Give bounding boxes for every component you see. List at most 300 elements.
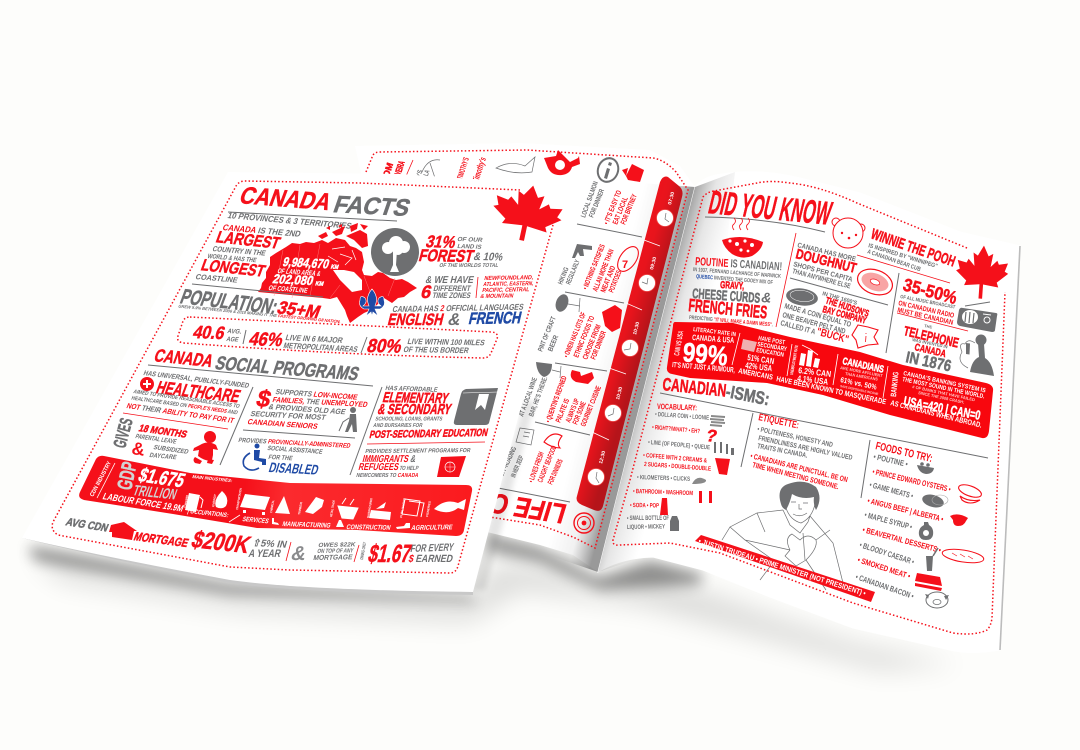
languages <box>386 302 525 329</box>
time zones: NEWFOUNDLAND, <box>484 275 534 282</box>
time zones: TIME ZONES <box>432 291 472 300</box>
row: salmon: FOR BRITNEY <box>619 193 639 226</box>
row: craft beer: PINT OF CRAFT <box>537 315 558 353</box>
affluent: SAVE DISPOSABLE INCOME <box>840 384 879 396</box>
row: craft beer: CHOOSE FROM <box>581 323 603 361</box>
affluent <box>840 356 885 396</box>
row: hiking: ALLAN MORE THAN <box>591 248 616 293</box>
mortgage row: & <box>289 543 309 565</box>
mortgage row: OWES $22K <box>318 541 357 549</box>
heading: canadian-isms: CANADIAN <box>662 374 727 401</box>
immigrants block <box>356 448 472 479</box>
poutine text: CHEESE CURDS <box>692 285 761 306</box>
icon: telephone <box>960 334 994 376</box>
icon: fleur de lis <box>360 289 384 316</box>
healthcare block: HAS UNIVERSAL, PUBLICLY-FUNDED <box>142 369 250 390</box>
time zones: 6 <box>419 281 434 302</box>
affluent: THAN AMERICANS <box>845 371 878 382</box>
unemployment: UNEMPLOYMENT RATE <box>789 345 799 375</box>
education block: AND BURSARIES FOR <box>373 423 423 429</box>
languages: FRENCH <box>467 308 523 328</box>
post secondary: HAVE POST <box>758 335 786 347</box>
masquerade line: AS CANADIANS WHEN ABROAD. <box>890 398 983 430</box>
healthcare block: NOT THEIR ABILITY TO PAY FOR IT <box>125 401 236 425</box>
drop shadows <box>28 533 960 670</box>
map stats: OF COASTLINE <box>267 284 309 295</box>
immigrants block: PROVIDES SETTLEMENT PROGRAMS FOR <box>365 448 472 455</box>
vocabulary list: • KILOMETERS • CLICKS <box>637 474 690 483</box>
winnie the pooh text: A CANADIAN BEAR CUB <box>866 249 922 273</box>
stats box: LIVE IN 6 MAJOR <box>284 333 344 345</box>
gdp: TRILLION <box>131 483 179 503</box>
row: hiking: REGULARLY <box>565 259 582 286</box>
dotted frame <box>52 181 553 573</box>
row: jeep: FOR DINNERS <box>546 457 565 486</box>
masquerade line: HAVE BEEN KNOWN TO MASQUERADE <box>776 374 887 406</box>
banner: justin trudeau: • JUSTIN TRUDEAU • PRIME MINISTER (NOT PRESIDENT) • <box>697 536 867 598</box>
dotted frame <box>366 150 688 548</box>
magazine: back left page <box>355 143 695 572</box>
affluent: 61% vs. 50% <box>840 375 878 392</box>
occupations: CONSTRUCTION <box>345 524 391 532</box>
low income block: FAMILIES, THE UNEMPLOYED <box>271 395 369 409</box>
title: DID YOU KNOW <box>705 185 836 233</box>
banking: SINCE THE 2008 CRASH: <box>918 390 965 405</box>
heading: social programs <box>152 345 362 385</box>
low income block: SUPPORTS LOW-INCOME <box>274 387 359 402</box>
unemployment: 6.2% CAN <box>798 365 832 379</box>
vocabulary list: • BATHROOM • WASHROOM <box>633 488 693 497</box>
population: GREW 5.9% BETWEEN 2006 & 2010 MAKING IT THE FASTEST GROWING G8 NATION. <box>178 304 342 324</box>
icon: radio <box>957 302 997 332</box>
magazine: right page <box>598 172 1020 652</box>
vocabulary list: LIQUOR • MICKEY <box>627 523 666 531</box>
foods to try list: • POUTINE • <box>873 452 909 469</box>
foods to try list: • SMOKED MEAT • <box>856 555 912 581</box>
row: hiking: • NOTHING SATISFIES <box>581 243 607 291</box>
doughnut text <box>791 242 859 291</box>
disability block: SOCIAL ASSISTANCE <box>266 445 324 456</box>
clock 2 <box>638 274 656 292</box>
banking: THE MOST SOUND IN THE WORLD. <box>902 376 985 400</box>
disability block <box>237 437 352 478</box>
industry icons: ENERGY <box>211 494 217 507</box>
row: craft beer: ETHNIC FOODS TO <box>572 314 596 359</box>
row: salmon: EAT LOCAL <box>611 195 630 226</box>
post secondary: SECONDARY <box>757 341 788 353</box>
row: craft beer: • OWEN HAS LOTS OF <box>562 311 588 359</box>
page sheet <box>355 143 695 572</box>
languages: ENGLISH <box>386 310 446 329</box>
banking: BANKING <box>889 371 901 397</box>
disability block: DISABLED <box>267 460 320 478</box>
top row icons and names: T.TIMOTHY'S <box>454 156 471 184</box>
heading: social programs: SOCIAL PROGRAMS <box>212 354 362 385</box>
page sheet <box>598 172 1020 652</box>
industry icons: PUBLISHING <box>399 497 407 518</box>
literacy: LITERACY RATE IN <box>693 327 736 338</box>
foods to try list: • PRINCE EDWARD OYSTERS • <box>872 467 952 494</box>
vocabulary list: • SMALL BOTTLE OF <box>627 515 669 522</box>
poutine text: & <box>761 289 772 306</box>
masquerade line: AMERICANS <box>738 366 774 382</box>
forest stat: 31% <box>424 231 458 252</box>
winnie the pooh text: IS INSPIRED BY "WINNIPEG" <box>867 243 938 270</box>
row: wine bar: ALWAYS UP <box>564 397 581 424</box>
row: wine bar: PALATE IS <box>554 397 571 424</box>
vocabulary list: • SODA • POP <box>630 502 659 510</box>
gdp: CDN INDUSTRY <box>89 461 113 498</box>
icon: house <box>109 522 137 540</box>
times: 12:30 <box>598 450 607 465</box>
times: 10:30 <box>615 386 624 401</box>
mortgage row: ON TOP OF ANY <box>317 547 354 555</box>
clock 4 <box>604 404 622 422</box>
row: wine bar: GOURMET CUISINE <box>579 385 603 428</box>
gdp: GDP <box>113 460 142 492</box>
can vs usa: CAN VS USA <box>672 330 685 356</box>
parental leave block: PARENTAL LEAVE <box>134 433 178 446</box>
heading: canadian-isms: -ISMS: <box>724 381 771 409</box>
hudson's bay text: BAY COMPANY <box>821 304 868 327</box>
intro left: COASTLINE <box>194 272 239 285</box>
page edge <box>1000 246 1020 650</box>
post secondary <box>741 335 788 373</box>
row: jeep: OFF-ROADING <box>498 446 518 478</box>
row: salmon: • IT'S EASY TO <box>602 189 623 226</box>
hudson's bay text: ONE BEAVER PELT AND <box>781 310 847 336</box>
industry icons <box>183 488 466 520</box>
low income block: & PROVIDES OLD AGE <box>267 402 347 416</box>
radio stat <box>897 275 959 327</box>
literacy: CANADA & USA <box>692 333 735 345</box>
doughnut text: CANADA HAS MORE <box>797 242 857 264</box>
industry icons: TRANSPORTATION <box>235 488 243 510</box>
foods to try list: • GAME MEATS • <box>868 480 914 501</box>
spine shading <box>490 180 695 572</box>
etiquette: FRIENDLINESS ARE HIGHLY VALUED <box>758 435 853 462</box>
gdp: $1.675 <box>135 465 188 492</box>
mortgage row: $ EARNED <box>407 553 454 565</box>
poutine text <box>688 256 782 328</box>
mortgage row: OWING ONLY <box>359 542 367 560</box>
intro left: 10 PROVINCES & 3 TERRITORIES <box>226 210 353 231</box>
times <box>598 191 676 465</box>
low income block: SECURITY FOR MOST <box>249 409 327 422</box>
etiquette: • CANADIANS ARE PUNCTUAL. BE ON <box>750 451 849 484</box>
low income block: CANADIAN SENIORS <box>246 417 319 431</box>
education block: SCHOOLING, LOANS, GRANTS <box>375 417 443 422</box>
immigrants block: REFUGEES TO HELP <box>357 462 420 473</box>
stats box <box>178 317 497 358</box>
etiquette: ETIQUETTE: <box>757 412 800 431</box>
vocabulary icons <box>660 416 734 531</box>
mortgage row: MORTGAGE <box>132 530 191 550</box>
education block: HAS AFFORDABLE <box>384 385 439 394</box>
gdp <box>89 460 234 519</box>
mortgage row <box>64 517 455 568</box>
row: hiking <box>557 243 643 294</box>
clock 1 <box>656 210 674 226</box>
stats box: AVG. <box>226 328 243 336</box>
times: 07:30 <box>667 191 676 206</box>
industry icons: TIMBER <box>297 501 303 515</box>
doughnut text: THAN ANYWHERE ELSE <box>791 268 851 291</box>
parental leave block: GIVES <box>110 416 137 450</box>
time zones: DIFFERENT <box>433 284 472 293</box>
masquerade line: IT'S NOT JUST A RUMOUR, <box>672 360 735 374</box>
icon: coffee circle <box>574 513 594 533</box>
occupations <box>229 515 453 532</box>
vocabulary list <box>627 402 711 531</box>
healthcare block <box>125 369 250 425</box>
stats box: 46% <box>247 329 285 351</box>
hudson's bay text: IN THE 1600'S <box>821 291 858 307</box>
industry icons: FISHERIES <box>425 501 432 517</box>
row: hiking: 7 <box>622 259 628 271</box>
row: jeep: IN HER JEEP <box>510 455 526 479</box>
industry icons: CHEMICAL <box>269 500 275 513</box>
top row icons and names: TOM <box>379 162 395 184</box>
icon: wheelchair <box>243 444 266 470</box>
spine shading <box>598 172 735 572</box>
population: POPULATION: <box>177 285 281 319</box>
doughnut text: SHOPS PER CAPITA <box>792 261 853 284</box>
title: FACTS <box>330 192 414 222</box>
mortgage row: FOR EVERY <box>409 542 455 555</box>
icon: bear face <box>832 218 865 248</box>
masquerade line <box>672 360 983 430</box>
radio stat: OF ALL MUSIC BROADCAST <box>900 294 956 311</box>
time zones: & MOUNTAIN <box>480 293 514 300</box>
immigrants block: IMMIGRANTS & <box>361 454 417 465</box>
banking: USA=420 | CAN=0 <box>902 393 982 423</box>
hudson's bay text: MADE A COIN EQUAL TO <box>783 301 852 329</box>
healthcare block: HEALTHCARE <box>154 377 244 406</box>
vocabulary list: • RIGHT?/WHAT? • EH? <box>652 424 700 435</box>
row: hiking: HIKING <box>557 266 571 286</box>
healthcare block: HEALTHCARE BASED ON PEOPLE'S NEEDS AND <box>130 396 238 416</box>
row: salmon <box>580 181 639 226</box>
times: 10:30 <box>632 321 641 336</box>
red gdp band <box>79 456 472 536</box>
mortgage row: ⇧5% IN <box>251 538 288 551</box>
stats box: 40.6 <box>191 321 228 343</box>
industry icons: CONSUMER <box>183 494 189 508</box>
intro left: LARGEST <box>214 228 283 252</box>
telephone text <box>902 323 960 375</box>
poutine text: IN 1937, FERNAND LACHANCE OF WARWICK <box>693 267 781 280</box>
vocabulary list: VOCABULARY: <box>657 402 697 412</box>
row: craft beer: BEER <box>547 334 560 353</box>
top row icons and names: BELLA <box>420 169 432 186</box>
post secondary: 42% USA <box>745 360 773 373</box>
map stats: OF LAND AREA & <box>276 267 322 278</box>
intro left: WORLD & HAS THE <box>206 253 258 264</box>
education block: ELEMENTARY <box>381 390 450 407</box>
affluent: ARE MORE AFFLUENT <box>840 365 883 378</box>
parental leave block: SUBSIDIZED <box>152 444 190 456</box>
icon: maple leaf <box>488 178 567 248</box>
poutine text: PREDICTING "IT WILL MAKE A DAMN MESS". <box>689 315 773 328</box>
forest stat: OF OUR <box>456 236 484 244</box>
intro left: LONGEST <box>199 256 268 280</box>
row: wine bar: FOR SOME <box>571 400 588 426</box>
poutine text: FRENCH FRIES <box>688 295 768 323</box>
portrait: justin trudeau <box>722 482 843 590</box>
foods to try list: • BLOODY CAESAR • <box>858 540 916 567</box>
disability block: PROVIDES PROVINCIALLY-ADMINISTERED <box>237 437 352 450</box>
poutine text: QUEBEC INVENTED THE GOOEY MIX OF <box>696 274 774 286</box>
icon: coin <box>785 286 819 308</box>
stats box: AGE <box>225 336 240 344</box>
icon: beaver pelt <box>852 325 878 348</box>
forest stat: & 10% <box>472 251 504 263</box>
occupations: SERVICES <box>241 516 270 525</box>
post secondary: EDUCATION <box>756 347 785 359</box>
telephone text: THE <box>924 323 933 330</box>
mortgage row: $1.67 <box>366 540 414 568</box>
languages: & <box>446 309 463 329</box>
stats box: 80% <box>365 336 404 357</box>
banking: CANADA'S BANKING SYSTEM IS <box>903 370 986 394</box>
unemployment: 4.1% USA <box>797 373 829 387</box>
stats box: OF THE US BORDER <box>402 345 470 355</box>
icon: poutine bowl <box>722 218 763 258</box>
vocabulary icons: ? <box>704 425 720 446</box>
top row icons and names: NAYS <box>413 169 425 186</box>
map stats: 202,080 KM <box>271 271 326 289</box>
foods to try list: • CANADIAN BACON • <box>854 572 915 601</box>
foods to try list: • ANGUS BEEF | ALBERTA • <box>867 496 945 524</box>
icon: book <box>454 388 498 425</box>
occupations: MANUFACTURING <box>281 521 331 530</box>
row: salmon: LOCAL SALMON <box>580 181 600 219</box>
icon: tree circle <box>371 228 419 276</box>
intro left <box>194 210 353 285</box>
time zones: PACIFIC, CENTRAL <box>482 287 530 294</box>
times: 09:30 <box>649 256 658 271</box>
radio stat: 35-50% <box>901 275 959 308</box>
etiquette: TIME WHEN MEETING SOMEONE. <box>751 460 840 491</box>
icon: senior <box>339 407 357 432</box>
telephone text: IN 1876 <box>904 349 953 375</box>
etiquette: TRAITS IN CANADA. <box>757 443 808 460</box>
winnie the pooh text: WINNIE THE POOH <box>869 226 957 270</box>
row: hiking: MEAT AND <box>599 264 618 294</box>
mortgage row: MORTGAGE <box>313 553 354 562</box>
strip of clock times <box>577 177 683 511</box>
row: craft beer <box>537 292 622 361</box>
mortgage row: $200K <box>188 527 254 559</box>
time zones: & WE HAVE <box>424 275 475 286</box>
row: wine bar: BAR, HE'S THERE. <box>528 376 549 418</box>
front page: canada facts <box>22 172 578 595</box>
gdp: MAIN INDUSTRIES: <box>192 474 234 483</box>
foods to try list: • MAPLE SYRUP • <box>863 510 913 532</box>
banking <box>889 370 986 423</box>
foods to try list: FOODS TO TRY: <box>874 440 934 465</box>
title: CANADA <box>236 183 335 216</box>
row: craft beer: FOR DINNER <box>589 329 608 361</box>
top row icons and names: OLIVEIRA <box>390 159 407 184</box>
title <box>236 183 414 222</box>
education block: & SECONDARY <box>376 402 453 418</box>
hudson's bay text <box>779 291 870 346</box>
hudson's bay text: CALLED IT A "BUCK" <box>779 316 850 346</box>
top row icons and names: Timothy's <box>470 156 488 184</box>
immigrants block: NEWCOMERS TO CANADA <box>356 473 420 479</box>
time zones <box>419 275 534 302</box>
forest stat: FOREST <box>417 245 477 266</box>
stats box: METROPOLITAN AREAS <box>282 341 359 354</box>
radio stat: ON CANADIAN RADIO <box>898 300 955 320</box>
winnie the pooh text <box>866 226 957 273</box>
row: jeep: CAUGHT SEAFOOD <box>536 444 559 484</box>
map stats <box>267 254 341 295</box>
gdp: LABOUR FORCE 19.9M <box>101 492 185 514</box>
row: wine bar: • QUENTIN'S REFINED <box>543 374 569 424</box>
row: jeep <box>498 428 565 486</box>
row: wine bar: AT A LOCAL WINE <box>518 377 539 418</box>
unemployment <box>789 345 832 387</box>
education block <box>368 385 489 441</box>
occupations: AGRICULTURE <box>411 524 453 532</box>
parental leave block <box>110 416 190 461</box>
page thickness <box>22 538 473 595</box>
mortgage row: A YEAR <box>247 548 282 560</box>
foods icons <box>915 462 985 608</box>
forest stat: OF THE WORLDS TOTAL <box>439 263 500 269</box>
poutine text: POUTINE IS CANADIAN! <box>695 256 782 273</box>
shadow of front page on magazine <box>470 400 535 590</box>
banking: # OF BANKS THAT HAVE FAILED <box>912 384 975 402</box>
row: hiking: POTATOES <box>607 269 623 294</box>
icon: maple leaf right <box>954 244 1010 300</box>
industry icons: RETAIL TRADE <box>329 500 336 517</box>
gdp: | OCCUPATIONS: <box>186 508 230 519</box>
stats box: LIVE WITHIN 100 MILES <box>406 337 486 347</box>
healthcare block: AIMED TO PROVIDE REASONABLE ACCESS TO <box>132 389 241 410</box>
map stats: 9,984,670 KM <box>281 254 341 272</box>
vocabulary list: 2 SUGARS • DOUBLE-DOUBLE <box>644 461 711 473</box>
forest stat: LAND IS <box>456 243 482 251</box>
low income block <box>246 386 369 431</box>
red stats band <box>667 322 993 438</box>
vocabulary list: • LINE (OF PEOPLE) • QUEUE <box>648 439 710 451</box>
intro left: CANADA IS THE 2ND <box>221 222 302 239</box>
telephone text: CANADA <box>913 342 947 360</box>
top row icons and names <box>379 150 644 186</box>
doughnut text: DOUGHNUT <box>794 245 859 276</box>
population: 35+M <box>275 297 324 322</box>
clock 5 <box>588 468 604 486</box>
parental leave block: & <box>130 438 146 460</box>
time zones: ATLANTIC, EASTERN, <box>483 281 534 288</box>
icon: passport <box>437 456 466 477</box>
telephone text: WAS INVENTED IN <box>912 337 948 349</box>
row: wine bar <box>518 362 603 428</box>
literacy: 99% <box>681 337 729 372</box>
foods to try list: • BEAVERTAIL DESSERTS • <box>861 525 942 555</box>
row: salmon: FOR DINNER <box>588 188 606 219</box>
low income block: $ <box>253 386 275 413</box>
affluent: CANADIANS <box>841 356 885 376</box>
industry icons: MANUFACTURING <box>366 497 374 518</box>
intro left: COUNTRY IN THE <box>211 244 267 258</box>
mortgage row: AVG CDN <box>64 517 110 534</box>
poutine text: GRAVY, <box>720 280 745 292</box>
